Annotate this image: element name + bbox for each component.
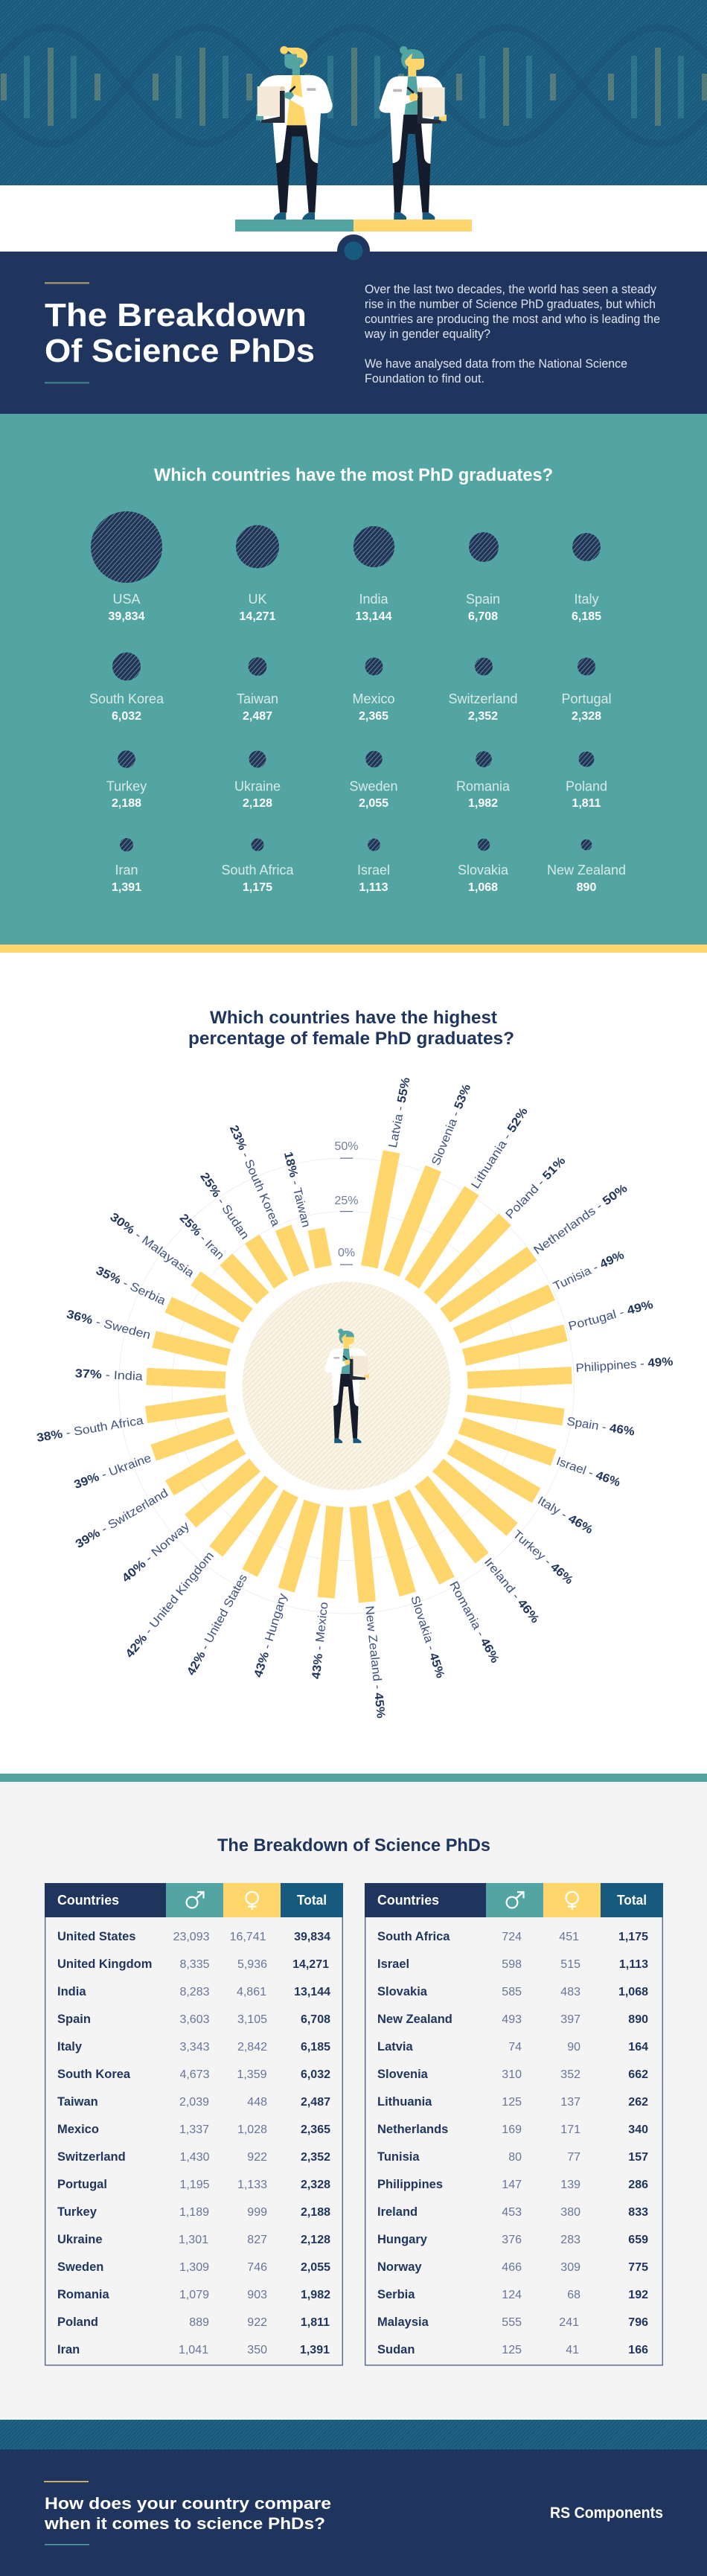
bubble Slovakia: Slovakia [458, 863, 509, 878]
country labels: New Zealand - 45% [362, 1605, 387, 1719]
country labels: 37% - India [74, 1367, 143, 1384]
table rows: 922 [247, 2151, 267, 2164]
country labels: Spain - 46% [566, 1416, 636, 1439]
brand name: RS Components [550, 2505, 663, 2522]
country labels: 36% - Sweden [65, 1308, 152, 1342]
table rows: 833 [628, 2206, 648, 2219]
table rows: 889 [189, 2316, 209, 2329]
table rows: 1,189 [179, 2206, 209, 2219]
footer call to action: when it comes to science PhDs? [44, 2514, 325, 2533]
table rows: 2,055 [301, 2261, 330, 2274]
table rows: 1,811 [301, 2316, 330, 2329]
table rows: 137 [560, 2096, 580, 2109]
heading: table: The Breakdown of Science PhDs [217, 1835, 490, 1856]
bubble South Africa: South Africa [221, 863, 295, 878]
hero panel background [0, 0, 707, 185]
table rows: 286 [628, 2179, 648, 2191]
intro text: We have analysed data from the National Science [365, 357, 627, 371]
table rows: 283 [560, 2234, 580, 2246]
balance beam [235, 220, 472, 231]
table rows: Mexico [57, 2123, 99, 2136]
country labels: 38% - South Africa [36, 1414, 144, 1445]
bubble Turkey: 2,188 [112, 797, 141, 810]
table rows: 2,039 [179, 2096, 209, 2109]
bubble Poland [566, 752, 607, 810]
bubble Taiwan: Taiwan [237, 691, 278, 706]
table rows: 659 [628, 2234, 648, 2246]
table rows: 340 [628, 2123, 648, 2136]
table rows: 1,337 [179, 2123, 209, 2136]
table rows: 451 [559, 1931, 579, 1943]
table rows: Romania [57, 2288, 110, 2301]
table rows: 890 [628, 2013, 648, 2026]
bubble Spain: Spain [466, 592, 500, 607]
bubble Slovakia: 1,068 [468, 881, 498, 894]
bubble Israel: Israel [357, 863, 390, 878]
bubble Italy [572, 533, 601, 623]
bubble USA: USA [112, 592, 141, 607]
table header: Total [297, 1893, 327, 1908]
table rows: 309 [560, 2261, 580, 2274]
heading: female graduates [188, 1008, 514, 1049]
country labels: 23% - South Korea [227, 1124, 282, 1228]
country labels: 43% - Hungary [252, 1592, 289, 1679]
country labels: Portugal - 49% [567, 1298, 654, 1333]
table rows: 1,359 [237, 2068, 267, 2081]
country labels: Poland - 51% [504, 1154, 568, 1221]
icon: female symbol [566, 1892, 578, 1910]
table header: Countries [57, 1893, 119, 1908]
country labels: Netherlands - 50% [531, 1182, 630, 1257]
table rows: 515 [560, 1958, 580, 1971]
intro text: rise in the number of Science PhD graduates, but which [365, 297, 656, 311]
table rows: 77 [567, 2151, 580, 2164]
table rows: 585 [502, 1986, 522, 1998]
country labels: Italy - 46% [535, 1495, 595, 1537]
country labels: 25% - Sudan [197, 1171, 252, 1241]
table rows [377, 1930, 648, 2356]
country labels: Tunisia - 49% [551, 1249, 626, 1294]
table rows: 39,834 [294, 1931, 330, 1943]
country labels: Slovakia - 45% [408, 1594, 447, 1680]
table rows: 8,283 [179, 1986, 210, 1998]
icon: female scientist in chart centre [324, 1329, 369, 1443]
table rows: 903 [247, 2289, 267, 2301]
table rows [57, 1930, 330, 2356]
table rows: 2,352 [301, 2151, 330, 2164]
country labels: Turkey - 46% [511, 1528, 575, 1587]
table rows: Serbia [377, 2288, 415, 2301]
table rows: 262 [628, 2096, 648, 2109]
table rows: Norway [377, 2260, 422, 2274]
bubble South Africa [221, 838, 295, 894]
table rows: 14,271 [292, 1958, 329, 1971]
table rows: 157 [628, 2151, 648, 2164]
intro text: way in gender equality? [364, 327, 490, 341]
table header [45, 1883, 343, 1917]
heading: Which countries have the most PhD graduates? [154, 465, 553, 485]
table rows: 746 [247, 2261, 267, 2274]
table rows: Slovakia [377, 1985, 428, 1998]
bubble Portugal [561, 658, 612, 723]
table rows: 483 [560, 1986, 580, 1998]
country labels: 18% - Taiwan [281, 1151, 313, 1229]
panel: data tables background [0, 1774, 707, 2420]
icon: male symbol [507, 1892, 524, 1908]
axis scale: 25% [334, 1195, 359, 1207]
bubble Iran: 1,391 [112, 881, 141, 894]
table rows: Iran [57, 2343, 80, 2356]
table rows: 6,032 [301, 2068, 330, 2081]
table rows: Sudan [377, 2343, 415, 2356]
table rows: 23,093 [173, 1931, 210, 1943]
bubble UK: UK [248, 592, 267, 607]
bubble Israel [357, 839, 390, 894]
table rows: Ireland [377, 2205, 418, 2219]
table rows: 2,365 [301, 2123, 330, 2136]
intro text: Foundation to find out. [365, 371, 484, 386]
country labels: Ireland - 46% [482, 1556, 541, 1626]
bubble Romania: Romania [456, 779, 511, 793]
intro text: countries are producing the most and who is leading the [365, 312, 660, 326]
table rows: 139 [560, 2179, 580, 2191]
table rows: 1,113 [619, 1958, 648, 1971]
bubble Ukraine [234, 750, 281, 810]
main title: Of Science PhDs [45, 333, 315, 369]
bubble Poland: 1,811 [572, 797, 601, 810]
country labels: Israel - 46% [554, 1455, 622, 1489]
country labels: 40% - Norway [120, 1520, 192, 1585]
bubble Poland: Poland [566, 779, 607, 793]
table rows: Israel [377, 1957, 409, 1971]
bubble Turkey: Turkey [106, 779, 147, 793]
table rows: 166 [628, 2344, 648, 2356]
table rows: 796 [628, 2316, 648, 2329]
table rows: 1,175 [618, 1931, 648, 1943]
main title [45, 282, 315, 384]
bubble Iran: Iran [115, 863, 138, 878]
country labels: 43% - Mexico [310, 1602, 330, 1680]
table rows: Hungary [377, 2233, 428, 2246]
table rows: 169 [502, 2123, 522, 2136]
table rows: Taiwan [57, 2095, 98, 2109]
table rows: 147 [502, 2179, 522, 2191]
bubble Taiwan: 2,487 [243, 710, 272, 723]
bubble Iran [112, 838, 141, 894]
bubble Mexico: Mexico [352, 691, 395, 706]
bubble Switzerland: 2,352 [468, 710, 498, 723]
footer call to action [44, 2481, 331, 2545]
axis scale: 0% [338, 1247, 355, 1259]
table rows: 2,842 [237, 2041, 267, 2054]
table rows: 448 [247, 2096, 267, 2109]
table rows: 2,188 [301, 2206, 330, 2219]
bubble UK [236, 525, 279, 623]
footer pattern band [0, 2420, 707, 2449]
icon: male symbol [187, 1892, 204, 1908]
bubble Romania: 1,982 [468, 797, 498, 810]
heading: female graduates: percentage of female PhD graduates? [188, 1029, 514, 1049]
table rows: 16,741 [230, 1931, 266, 1943]
table rows: 1,430 [179, 2151, 210, 2164]
table rows: 1,133 [237, 2179, 267, 2191]
country labels: Philippines - 49% [575, 1355, 674, 1375]
bubble Portugal: 2,328 [572, 710, 601, 723]
table rows: 3,603 [179, 2013, 210, 2026]
bubble Sweden: 2,055 [359, 797, 388, 810]
bubble India: India [359, 592, 388, 607]
bubble Mexico: 2,365 [359, 710, 388, 723]
country labels: 35% - Serbia [94, 1265, 167, 1308]
table header: Countries [377, 1893, 439, 1908]
table rows: Netherlands [377, 2123, 448, 2136]
table rows: Latvia [377, 2040, 414, 2054]
table rows: 376 [502, 2234, 522, 2246]
table rows: 1,309 [179, 2261, 209, 2274]
table rows: 171 [560, 2123, 580, 2136]
table rows: 1,028 [237, 2123, 267, 2136]
country labels: Lithuania - 52% [469, 1105, 531, 1191]
bubble Israel: 1,113 [359, 881, 388, 894]
country labels: Latvia - 55% [387, 1076, 413, 1149]
table rows: 724 [502, 1931, 522, 1943]
country labels: 42% - United Kingdom [124, 1550, 217, 1661]
balance pivot [337, 234, 370, 267]
bubble Turkey [106, 750, 147, 810]
table rows: South Korea [57, 2068, 131, 2081]
icon: female symbol [246, 1892, 258, 1910]
table rows: Turkey [57, 2205, 97, 2219]
table rows: Switzerland [57, 2150, 126, 2164]
table rows: 3,105 [237, 2013, 267, 2026]
table rows: 41 [566, 2344, 579, 2356]
bubble New Zealand: New Zealand [547, 863, 626, 878]
country labels: 25% - Iran [177, 1212, 226, 1262]
bubble Switzerland: Switzerland [448, 691, 518, 706]
footer panel [0, 2449, 707, 2576]
table rows: Italy [57, 2040, 83, 2054]
bubble Ukraine: Ukraine [234, 779, 281, 793]
bubble New Zealand: 890 [577, 881, 596, 894]
bubble India: 13,144 [356, 610, 392, 623]
table rows: India [57, 1985, 86, 1998]
table rows: 90 [567, 2041, 580, 2054]
table rows: 1,195 [179, 2179, 210, 2191]
table rows: 453 [502, 2206, 522, 2219]
table rows: 241 [559, 2316, 579, 2329]
table rows: Poland [57, 2315, 98, 2329]
table rows: 922 [247, 2316, 267, 2329]
table rows: Portugal [57, 2178, 107, 2191]
main title: The Breakdown [45, 297, 307, 333]
bubble South Korea [89, 652, 164, 723]
table rows: 350 [247, 2344, 267, 2356]
axis scale: 50% [334, 1140, 359, 1153]
bubble Spain: 6,708 [468, 610, 498, 623]
table rows: 13,144 [294, 1986, 330, 1998]
scientists on balance [235, 46, 472, 231]
country labels: 39% - Ukraine [72, 1452, 153, 1492]
table rows: 1,391 [300, 2344, 330, 2356]
heading: female graduates: Which countries have the highest [210, 1008, 497, 1028]
table rows: 999 [247, 2206, 267, 2219]
table rows: 1,079 [179, 2289, 209, 2301]
bubble Mexico [352, 658, 395, 723]
table rows: 397 [560, 2013, 580, 2026]
table rows: 466 [502, 2261, 522, 2274]
bubble USA: 39,834 [109, 610, 145, 623]
table left [45, 1883, 343, 2365]
table rows: 380 [560, 2206, 580, 2219]
table rows: Slovenia [377, 2068, 429, 2081]
table header [365, 1883, 663, 1917]
table rows: 493 [502, 2013, 522, 2026]
table rows: United Kingdom [57, 1957, 152, 1971]
country labels: Romania - 46% [447, 1579, 501, 1665]
bubble Italy: Italy [574, 592, 599, 607]
table rows: 80 [508, 2151, 522, 2164]
footer call to action: How does your country compare [45, 2494, 331, 2513]
country labels [36, 1076, 674, 1719]
table rows: Sweden [57, 2260, 103, 2274]
table rows: 352 [560, 2068, 580, 2081]
bubble Switzerland [448, 658, 518, 723]
table rows: Malaysia [377, 2315, 429, 2329]
country labels: 30% - Malayasia [107, 1211, 196, 1280]
bubble India [354, 526, 394, 623]
table rows: 3,343 [179, 2041, 210, 2054]
table rows: 662 [628, 2068, 648, 2081]
table rows: 6,185 [301, 2041, 330, 2054]
table rows: 310 [502, 2068, 522, 2081]
bubble UK: 14,271 [240, 610, 276, 623]
table rows: 74 [508, 2041, 522, 2054]
table rows: 2,128 [301, 2234, 330, 2246]
table rows: 8,335 [179, 1958, 210, 1971]
table rows: 1,301 [179, 2234, 208, 2246]
table rows: 1,041 [179, 2344, 208, 2356]
dna helix decoration [0, 28, 707, 144]
table rows: 598 [502, 1958, 522, 1971]
table rows: Philippines [377, 2178, 443, 2191]
radial bar chart [36, 1076, 674, 1719]
country labels: Slovenia - 53% [429, 1082, 473, 1167]
table rows: 125 [502, 2096, 522, 2109]
intro text: Over the last two decades, the world has seen a steady [365, 282, 656, 296]
intro text [364, 282, 660, 386]
panel: most PhD graduates [0, 414, 707, 953]
table rows: 6,708 [301, 2013, 330, 2026]
table rows: Tunisia [377, 2150, 420, 2164]
table rows: 1,982 [301, 2289, 330, 2301]
bubble Slovakia [458, 839, 509, 894]
bubble South Africa: 1,175 [243, 881, 272, 894]
table rows: 124 [502, 2289, 522, 2301]
table rows: 192 [628, 2289, 648, 2301]
icon: male scientist [256, 46, 333, 220]
table rows: 1,068 [618, 1986, 648, 1998]
table rows: 827 [247, 2234, 267, 2246]
table rows: Spain [57, 2013, 91, 2026]
table right [365, 1883, 663, 2365]
table rows: Ukraine [57, 2233, 103, 2246]
bubble Spain [466, 532, 500, 623]
table rows: 68 [567, 2289, 580, 2301]
table rows: 4,673 [179, 2068, 210, 2081]
bubble Taiwan [237, 657, 278, 723]
chart centre disc [225, 1265, 467, 1507]
table rows: 555 [502, 2316, 522, 2329]
country labels: 42% - United States [185, 1572, 250, 1678]
intro panel [0, 234, 707, 414]
bubble South Korea: 6,032 [112, 710, 141, 723]
bubble New Zealand [547, 840, 626, 894]
bubble USA [91, 511, 162, 623]
bubble Romania [456, 751, 511, 810]
table rows: 4,861 [237, 1986, 266, 1998]
table rows: 775 [628, 2261, 648, 2274]
axis scale [334, 1140, 359, 1265]
table rows: 164 [628, 2041, 648, 2054]
table rows: Lithuania [377, 2095, 432, 2109]
icon: female scientist [379, 46, 447, 220]
table rows: 125 [502, 2344, 522, 2356]
table header: Total [617, 1893, 647, 1908]
table rows: 5,936 [237, 1958, 267, 1971]
bubble Sweden [349, 751, 398, 810]
bubble Sweden: Sweden [349, 779, 398, 793]
table rows: 2,328 [301, 2179, 330, 2191]
bubble Portugal: Portugal [561, 691, 612, 706]
table rows: New Zealand [377, 2013, 452, 2026]
bubble South Korea: South Korea [89, 691, 164, 706]
bubble Italy: 6,185 [572, 610, 601, 623]
country labels: 39% - Switzerland [74, 1487, 170, 1551]
table rows: United States [57, 1930, 135, 1943]
table rows: South Africa [377, 1930, 450, 1943]
radial bars [145, 1150, 572, 1602]
table rows: 2,487 [301, 2096, 330, 2109]
bubble Ukraine: 2,128 [243, 797, 272, 810]
